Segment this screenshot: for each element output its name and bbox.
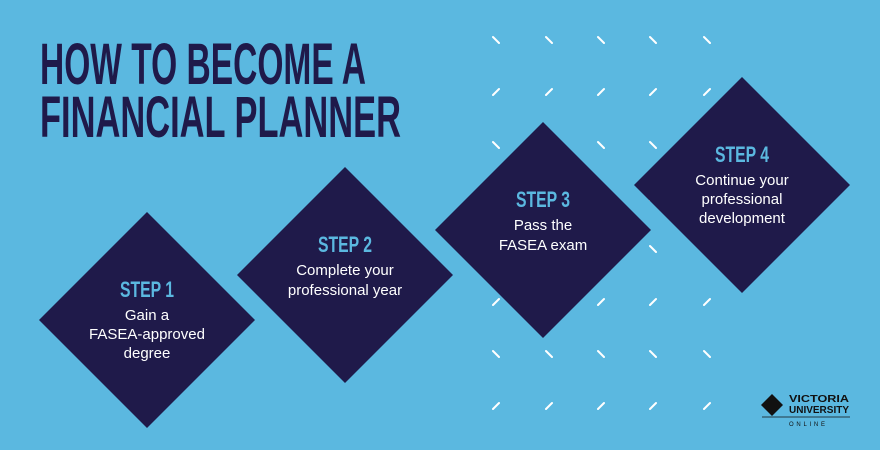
title: FINANCIAL PLANNER	[40, 85, 401, 150]
panel: step 4: development	[699, 210, 786, 227]
panel: step 4: Continue your	[695, 172, 789, 189]
panel: step 3: Pass the	[514, 217, 572, 234]
panel: step 1: FASEA-approved	[89, 326, 205, 343]
panel: step 3: FASEA exam	[499, 237, 587, 254]
title: HOW TO BECOME A	[40, 32, 366, 97]
logo: VICTORIA	[789, 394, 849, 405]
panel: step 1: STEP 1	[120, 277, 174, 302]
logo: ONLINE	[789, 422, 825, 428]
panel: step 4	[634, 77, 850, 293]
logo	[761, 394, 850, 428]
panel: step 2: professional year	[288, 282, 402, 299]
logo: UNIVERSITY	[789, 405, 849, 416]
panel: step 1: degree	[124, 345, 170, 362]
panel: step 1	[39, 212, 255, 428]
panel: step 4: STEP 4	[715, 142, 770, 167]
panel: step 1: Gain a	[125, 307, 170, 324]
title	[40, 32, 401, 150]
panel: step 3	[435, 122, 651, 338]
panel: step 4: professional	[702, 191, 782, 208]
panel: step 2: STEP 2	[318, 232, 372, 257]
panel: step 2: Complete your	[296, 262, 394, 279]
panel: step 3: STEP 3	[516, 187, 570, 212]
panel: step 2	[237, 167, 453, 383]
